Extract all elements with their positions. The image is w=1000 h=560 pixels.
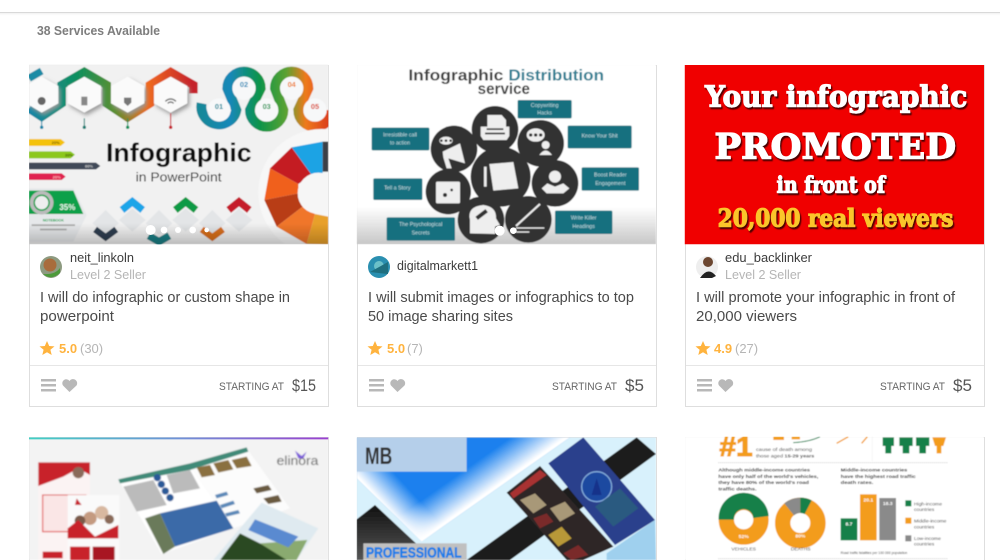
icons: list and heart <box>41 379 77 392</box>
thumbnail: infographic distribution service: The Psychological <box>399 222 442 228</box>
thumbnail: infographic distribution service: Tell a Story <box>384 186 411 192</box>
seller name: digitalmarkett1 <box>397 258 478 273</box>
seller avatar <box>696 256 718 278</box>
price: $5 <box>953 376 972 395</box>
thumbnail: infographic in PowerPoint: 20% <box>53 174 61 179</box>
rating: 4.9 <box>714 341 732 356</box>
rating <box>368 341 423 356</box>
thumbnail: infographic in PowerPoint: 35% <box>59 203 75 212</box>
thumbnail: road traffic infographic: #1 <box>719 431 753 462</box>
seller name: edu_backlinker <box>725 250 813 265</box>
thumbnail: road traffic infographic: countries <box>914 542 935 548</box>
thumbnail: infographic in PowerPoint: 30% <box>65 152 73 157</box>
price: STARTING AT <box>552 381 617 393</box>
seller level: Level 2 Seller <box>70 267 147 282</box>
gig title <box>368 290 634 325</box>
rating: (27) <box>735 341 758 356</box>
thumbnail: road traffic infographic: Middle-income <box>914 519 947 525</box>
price <box>880 376 972 395</box>
seller avatar <box>368 256 390 278</box>
top navigation bar <box>0 0 1000 12</box>
thumbnail: infographic in PowerPoint: NOTEBOOK <box>43 219 64 223</box>
thumbnail: infographic in PowerPoint <box>29 64 328 244</box>
thumbnail: infographic distribution service: Boost Reader <box>594 173 627 179</box>
thumbnail: road traffic infographic: those aged 15-29 years <box>756 453 815 459</box>
rating: 5.0 <box>59 341 77 356</box>
thumbnail: professional design: MB <box>365 443 392 470</box>
thumbnail: road traffic infographic <box>685 431 984 560</box>
gig title: 20,000 viewers <box>696 309 797 325</box>
thumbnail: road traffic infographic: they have 80% of the world's road <box>718 480 809 486</box>
thumbnail: road traffic infographic: Low-income <box>914 536 941 542</box>
thumbnail: infographic distribution service: Headings <box>572 224 595 230</box>
panel: service card 5 <box>357 437 656 560</box>
price <box>552 376 644 395</box>
rating: (7) <box>407 341 423 356</box>
rating: (30) <box>80 341 103 356</box>
thumbnail: infographic distribution service: Write Killer <box>571 215 597 221</box>
gig title: I will do infographic or custom shape in <box>40 290 290 306</box>
price: STARTING AT <box>880 381 945 393</box>
thumbnail: infographic in PowerPoint: in PowerPoint <box>136 171 222 185</box>
thumbnail: road traffic infographic: 8.7 <box>846 521 853 527</box>
thumbnail: infographic distribution service: service <box>478 81 530 98</box>
thumbnail: road traffic infographic: 20.1 <box>863 497 873 503</box>
icons: list and heart <box>697 379 733 392</box>
thumbnail: infographic distribution service: Infographic <box>408 68 503 85</box>
rating: 5.0 <box>387 341 405 356</box>
carousel dots <box>146 225 209 235</box>
price: STARTING AT <box>219 381 284 393</box>
gig title <box>696 290 956 325</box>
thumbnail: infographic in PowerPoint: 03 <box>263 102 271 111</box>
seller name: neit_linkoln <box>70 250 134 265</box>
thumbnail: road traffic infographic: 18.3 <box>883 501 893 507</box>
gig title <box>40 290 290 325</box>
thumbnail: brochure mockups <box>29 437 328 560</box>
thumbnail: infographic distribution service: to action <box>390 141 410 147</box>
thumbnail: road traffic infographic: 52% <box>739 534 749 540</box>
gig title: I will promote your infographic in front of <box>696 290 956 306</box>
thumbnail: road traffic infographic: DEATHS <box>791 546 811 552</box>
thumbnail: road traffic infographic: countries <box>914 524 935 530</box>
gig title: I will submit images or infographics to top <box>368 290 634 306</box>
thumbnail: road traffic infographic: Middle-income countries <box>841 468 908 474</box>
seller level: Level 2 Seller <box>725 267 802 282</box>
panel: service card 4 <box>29 437 329 560</box>
thumbnail: road traffic infographic: traffic deaths. <box>718 486 757 492</box>
price: $5 <box>625 376 644 395</box>
panel: service card 3 <box>685 65 984 407</box>
thumbnail: infographic in PowerPoint: Infographic <box>106 138 252 168</box>
gig title: powerpoint <box>40 309 114 325</box>
thumbnail: infographic distribution service: Know Your Shit <box>582 134 618 140</box>
thumbnail: road traffic infographic: Although middle-income countries <box>718 468 810 474</box>
results count heading: 38 Services Available <box>37 23 160 38</box>
thumbnail: road traffic infographic: Road traffic fatalities per 100 000 population <box>841 551 907 555</box>
thumbnail: road traffic infographic: VEHICLES <box>731 546 757 552</box>
thumbnail: infographic distribution service <box>357 64 656 244</box>
thumbnail: infographic in PowerPoint: 02 <box>240 80 248 89</box>
panel: service card 2 <box>357 64 656 407</box>
thumbnail: your infographic promoted: 20,000 real viewers <box>718 204 953 233</box>
thumbnail: infographic in PowerPoint: 04 <box>288 80 297 89</box>
rating <box>40 341 103 356</box>
thumbnail: your infographic promoted: Your infographic <box>704 79 967 114</box>
thumbnail: infographic distribution service: Secrets <box>412 231 430 237</box>
thumbnail: road traffic infographic: countries <box>914 507 935 513</box>
thumbnail: professional design <box>357 437 656 560</box>
thumbnail: brochure mockups: elinora <box>277 454 319 468</box>
carousel dots <box>495 226 517 236</box>
top gradient strip <box>29 437 328 439</box>
thumbnail: road traffic infographic: 80% <box>795 533 806 539</box>
thumbnail: infographic in PowerPoint: 05 <box>311 102 319 111</box>
thumbnail: infographic in PowerPoint: 01 <box>215 102 223 111</box>
thumbnail: infographic distribution service: Engagement <box>595 181 626 187</box>
thumbnail: your infographic promoted: in front of <box>777 172 886 198</box>
thumbnail: infographic in PowerPoint: 20% <box>52 140 60 145</box>
thumbnail: infographic distribution service: Irresistible call <box>383 132 417 138</box>
thumbnail: infographic in PowerPoint: 60% <box>85 164 93 169</box>
thumbnail: your infographic promoted <box>685 65 984 244</box>
thumbnail: road traffic infographic: High-income <box>914 501 942 507</box>
thumbnail: infographic distribution service: Hacks <box>537 110 552 116</box>
seller avatar <box>40 256 62 278</box>
thumbnail: infographic distribution service: Distribution <box>508 68 604 85</box>
thumbnail: road traffic infographic: death rates. <box>841 480 874 486</box>
thumbnail: road traffic infographic: have the highest road traffic <box>841 474 916 480</box>
thumbnail: road traffic infographic: have only half of the world's vehicles, <box>718 474 819 480</box>
thumbnail: infographic distribution service: Copywriting <box>531 103 559 109</box>
icons: list and heart <box>369 379 405 392</box>
panel: service card 1 <box>29 64 329 407</box>
thumbnail: road traffic infographic: cause of death among <box>756 447 812 453</box>
gig title: 50 image sharing sites <box>368 309 513 325</box>
price <box>219 376 316 395</box>
panel: service card 6 <box>685 431 984 560</box>
rating <box>696 341 758 356</box>
price: $15 <box>292 376 316 395</box>
thumbnail: your infographic promoted: PROMOTED <box>714 126 956 167</box>
